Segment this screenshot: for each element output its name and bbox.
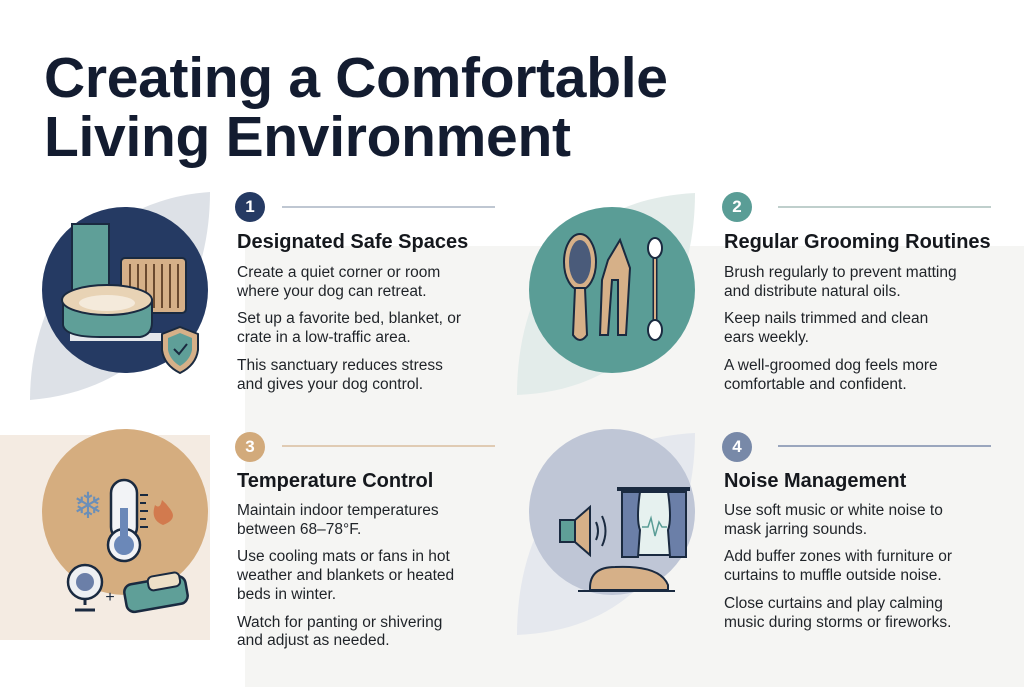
icon: safe spaces [30,192,210,400]
title: Living Environment [44,105,571,169]
panel: grooming [517,192,991,395]
badge 3: 3 [245,437,255,456]
panel: noise [517,429,991,635]
badge 3 [235,432,265,462]
text 3: Use cooling mats or fans in hot [237,548,450,565]
text 4: mask jarring sounds. [724,521,867,538]
heading 1: Designated Safe Spaces [237,231,468,253]
panel: safe spaces [30,192,495,400]
title: Creating a Comfortable [44,46,668,110]
text 1: This sanctuary reduces stress [237,357,443,374]
text 2: Brush regularly to prevent matting [724,264,957,281]
heading 3: Temperature Control [237,470,433,492]
text 3: beds in winter. [237,586,336,603]
text 2: Keep nails trimmed and clean [724,310,928,327]
text 2: comfortable and confident. [724,376,907,393]
text 4: Add buffer zones with furniture or [724,548,952,565]
text 1: and gives your dog control. [237,376,423,393]
text 4: Use soft music or white noise to [724,502,943,519]
text 3: weather and blankets or heated [237,567,454,584]
icon: temperature: + [105,589,115,606]
text 3: Maintain indoor temperatures [237,502,439,519]
heading 4: Noise Management [724,470,906,492]
badge 4 [722,432,752,462]
text 1: Set up a favorite bed, blanket, or [237,310,461,327]
text 2: A well-groomed dog feels more [724,357,938,374]
text 1 [237,264,461,393]
title [44,46,668,169]
badge 2: 2 [732,197,742,216]
icon: grooming tools [517,193,695,395]
badge 1 [235,192,265,222]
badge 1: 1 [245,197,255,216]
text 3: between 68–78°F. [237,521,361,538]
text 1: Create a quiet corner or room [237,264,440,281]
text 4: Close curtains and play calming [724,595,943,612]
badge 4: 4 [732,437,742,456]
panel: temperature [42,429,495,649]
badge 2 [722,192,752,222]
text 1: where your dog can retreat. [237,283,427,300]
text 2 [724,264,957,393]
heading 2: Regular Grooming Routines [724,231,991,253]
text 2: ears weekly. [724,329,809,346]
text 4: music during storms or fireworks. [724,614,951,631]
text 4 [724,502,952,631]
text 3 [237,502,454,649]
icon: temperature [42,429,208,614]
text 4: curtains to muffle outside noise. [724,567,942,584]
text 3: Watch for panting or shivering [237,614,442,631]
text 3: and adjust as needed. [237,632,390,649]
icon: noise [517,429,695,635]
text 2: and distribute natural oils. [724,283,901,300]
text 1: crate in a low-traffic area. [237,329,411,346]
icon: temperature: ❄ [73,486,103,527]
